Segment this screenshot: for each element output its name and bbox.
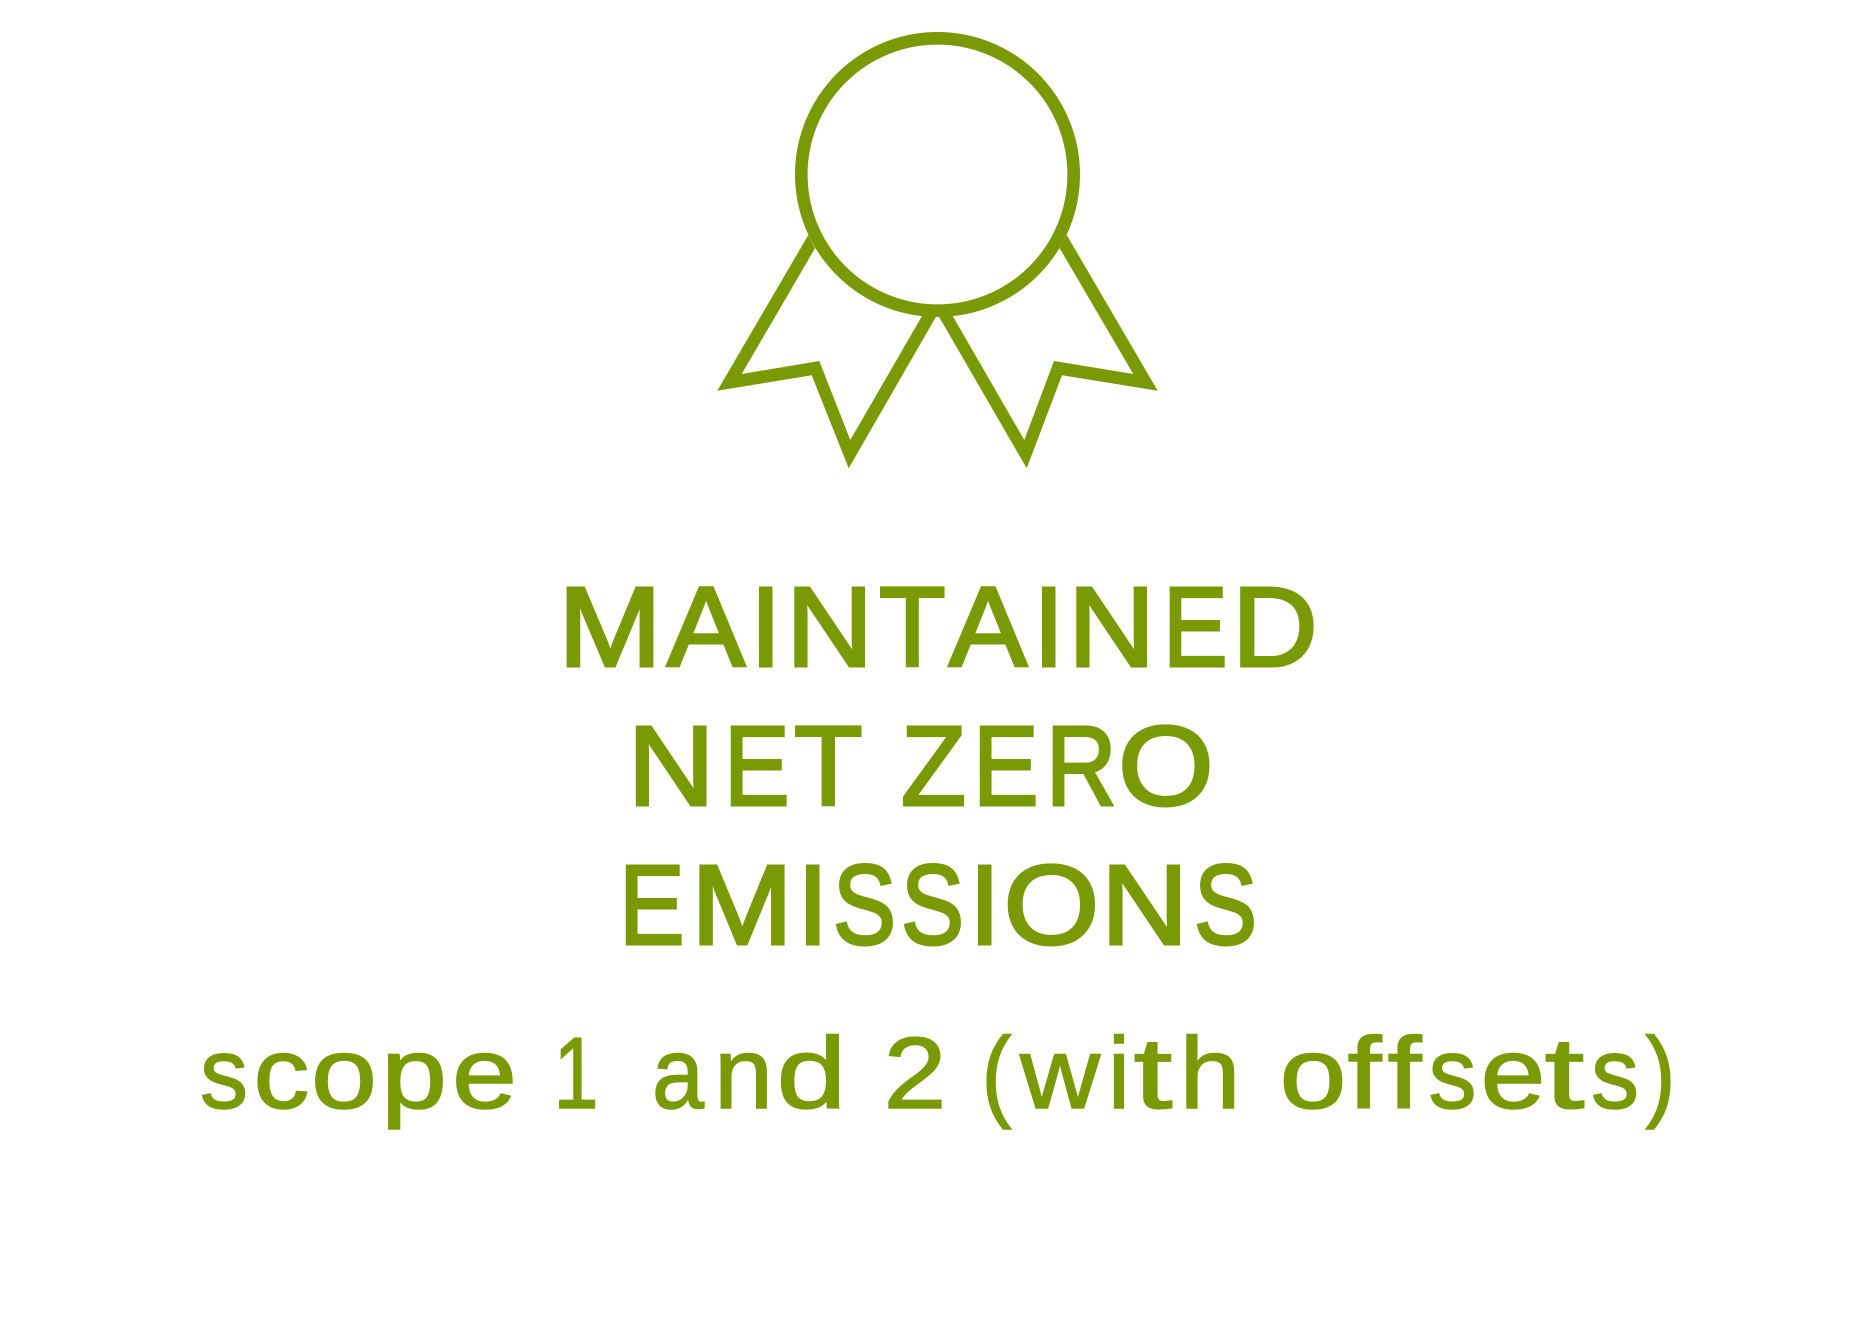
heading line 3: M xyxy=(691,842,793,968)
subheading: f xyxy=(1348,1018,1383,1130)
heading line 3: I xyxy=(797,842,828,968)
subheading: d xyxy=(776,1018,846,1130)
heading line 3: E xyxy=(619,842,685,968)
heading line 1: N xyxy=(1068,564,1155,690)
icon part: left ribbon xyxy=(717,235,936,468)
heading line 3: S xyxy=(833,842,896,968)
heading line 1: I xyxy=(1033,564,1064,690)
subheading: e xyxy=(452,1018,517,1130)
heading line 3: N xyxy=(1101,842,1188,968)
subheading: 2 xyxy=(884,1018,946,1130)
subheading: s xyxy=(1591,1018,1639,1130)
subheading: w xyxy=(1019,1018,1101,1130)
subheading: n xyxy=(714,1018,773,1130)
heading line 1: A xyxy=(949,564,1028,690)
subheading: h xyxy=(1180,1018,1240,1130)
subheading: e xyxy=(1480,1018,1546,1130)
heading line 1: N xyxy=(786,564,873,690)
icon part: right ribbon xyxy=(939,235,1158,468)
heading line 3: O xyxy=(1004,842,1099,968)
heading line 3: I xyxy=(969,842,1000,968)
subheading: ) xyxy=(1646,1018,1676,1130)
subheading: s xyxy=(200,1018,248,1130)
heading line 1: D xyxy=(1232,564,1318,690)
subheading: o xyxy=(1280,1018,1346,1130)
heading xyxy=(558,564,1318,968)
subheading: i xyxy=(1108,1018,1130,1130)
heading line 2: Z xyxy=(901,703,966,829)
subheading: p xyxy=(381,1018,447,1130)
icon part: medal circle xyxy=(801,38,1074,311)
heading line 2: R xyxy=(1046,703,1117,829)
heading line 2: T xyxy=(794,703,861,829)
heading line 1: T xyxy=(879,564,946,690)
subheading: c xyxy=(254,1018,310,1130)
heading line 3: S xyxy=(1194,842,1257,968)
heading line 2: N xyxy=(628,703,715,829)
icon: award rosette xyxy=(717,38,1158,468)
subheading: f xyxy=(1388,1018,1423,1130)
subheading: t xyxy=(1544,1018,1584,1130)
heading line 2: E xyxy=(973,703,1039,829)
subheading: t xyxy=(1134,1018,1172,1130)
subheading: 1 xyxy=(554,1018,598,1130)
heading line 1: I xyxy=(750,564,781,690)
heading line 2: O xyxy=(1118,703,1214,829)
heading line 1: A xyxy=(667,564,746,690)
heading line 3: S xyxy=(901,842,964,968)
heading line 1: M xyxy=(558,564,662,690)
heading line 2: E xyxy=(724,703,790,829)
subheading: a xyxy=(652,1018,705,1130)
heading line 1: E xyxy=(1163,564,1228,690)
subheading: ( xyxy=(982,1018,1012,1130)
subheading: s xyxy=(1428,1018,1476,1130)
subheading: o xyxy=(311,1018,377,1130)
